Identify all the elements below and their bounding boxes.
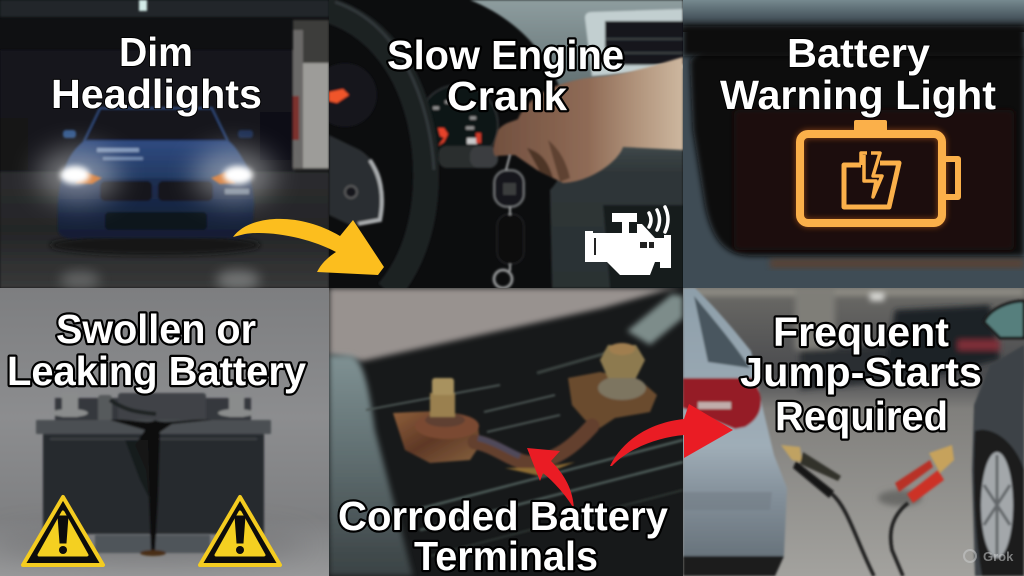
heading: slow engine crank: Slow Engine [387, 32, 624, 78]
heading: slow engine crank: Crank [447, 73, 567, 119]
heading: battery warning light [720, 30, 996, 118]
illustration: dark car side [972, 301, 1024, 576]
icon: warning triangle right [200, 497, 280, 565]
watermark: grok: Grok [983, 549, 1014, 564]
arrow: red arrow from terminals to jump-starts [610, 404, 733, 466]
display screen [734, 110, 1014, 250]
icon: battery warning [800, 120, 958, 223]
heading: battery warning light: Battery [787, 30, 930, 76]
heading: frequent jump-starts required: Frequent [773, 309, 949, 355]
heading: swollen or leaking battery: Swollen or [56, 306, 256, 352]
illustration: battery top [366, 352, 683, 556]
illustration: car battery [36, 393, 271, 556]
panel: dim headlights [0, 0, 329, 290]
heading: dim headlights [51, 29, 262, 117]
heading: dim headlights: Dim [119, 29, 193, 75]
heading: frequent jump-starts required [740, 309, 982, 439]
arrow: red arrow to corrosion [527, 448, 574, 509]
panel: slow engine crank [313, 0, 683, 292]
icon: ceiling light [139, 0, 147, 11]
heading: dim headlights: Headlights [51, 71, 262, 117]
heading: battery warning light: Warning Light [720, 72, 996, 118]
illustration: silver car rear [683, 288, 787, 576]
illustration: black jumper clamp and cable [781, 445, 874, 576]
heading: corroded battery terminals [338, 493, 668, 576]
panel: battery warning light [683, 0, 1024, 288]
arrow: yellow arrow from headlights to engine crank [233, 219, 384, 275]
panel: swollen or leaking battery [0, 288, 329, 576]
illustration: blue car front [38, 108, 274, 255]
illustration: hand holding key [493, 57, 683, 288]
heading: frequent jump-starts required: Required [775, 393, 948, 439]
headlight right [194, 149, 274, 201]
panel: corroded battery terminals [329, 288, 683, 576]
heading: corroded battery terminals: Corroded Battery [338, 493, 668, 539]
heading: swollen or leaking battery [7, 306, 306, 394]
panel: frequent jump-starts required [683, 288, 1024, 576]
headlight left [38, 149, 118, 201]
watermark: grok [964, 549, 1014, 564]
heading: frequent jump-starts required: Jump-Starts [740, 349, 982, 395]
illustration: corroded terminals and cable [393, 343, 657, 476]
heading: slow engine crank [387, 32, 624, 119]
icon: warning triangle left [23, 497, 103, 565]
illustration: red jumper clamp and cable [891, 445, 954, 576]
illustration: steering wheel [320, 2, 434, 292]
heading: swollen or leaking battery: Leaking Battery [7, 348, 306, 394]
icon: engine with sound waves [585, 207, 671, 275]
